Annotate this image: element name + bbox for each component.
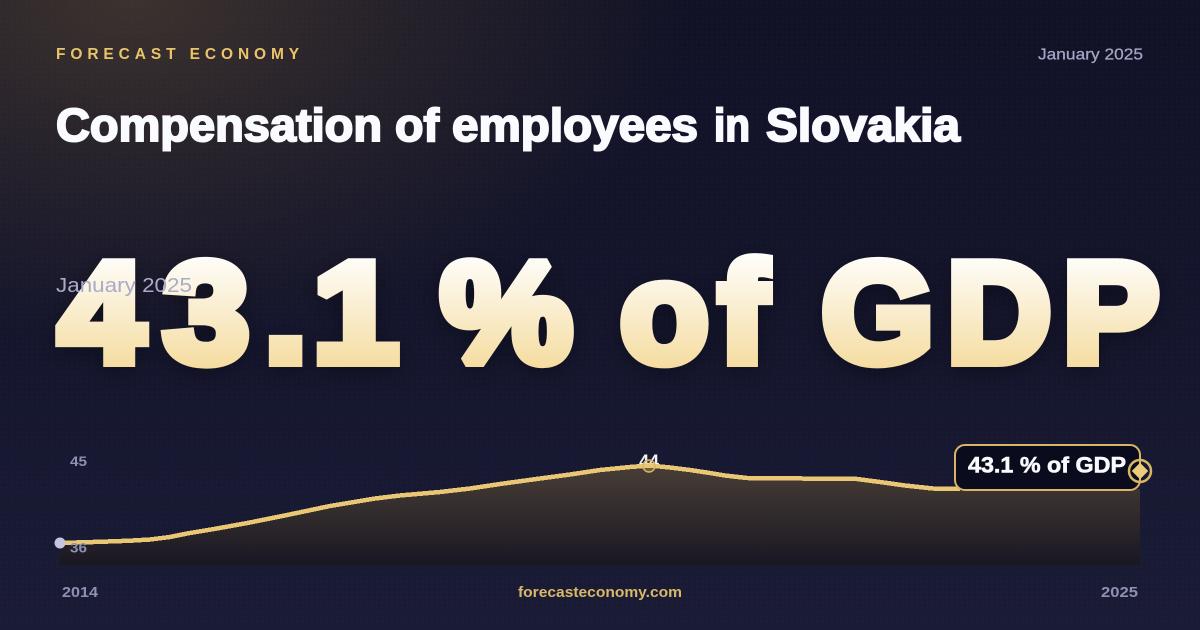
axis label: min: 36 — [70, 540, 87, 556]
title — [56, 99, 960, 151]
peak marker — [643, 460, 655, 472]
x axis label: start year: 2014 — [62, 585, 98, 601]
peak value label: 44 — [639, 452, 659, 472]
title: employees — [452, 99, 698, 151]
date label top right: January 2025 — [1038, 46, 1143, 64]
hero value — [59, 233, 1159, 392]
source website: forecasteconomy.com — [518, 585, 682, 601]
title: in — [714, 99, 750, 151]
title: of — [395, 99, 440, 151]
title: Compensation — [56, 99, 382, 151]
axis label: max: 45 — [70, 453, 87, 469]
chart area fill — [60, 466, 1140, 565]
date label overlapping hero: January 2025 — [56, 275, 192, 297]
hero value: 43.1 — [59, 234, 398, 392]
current value callout — [955, 445, 1140, 490]
eyebrow: brand name: FORECAST ECONOMY — [56, 46, 304, 63]
start point marker — [54, 538, 66, 548]
area chart — [60, 466, 1140, 565]
current value marker — [1129, 460, 1151, 482]
hero value: GDP — [822, 233, 1159, 392]
hero value: % — [441, 233, 572, 392]
x axis label: end year: 2025 — [1101, 585, 1138, 601]
chart line — [60, 466, 960, 543]
title: Slovakia — [766, 99, 960, 151]
hero value: of — [620, 234, 768, 392]
current value callout: 43.1 % of GDP — [968, 452, 1126, 478]
